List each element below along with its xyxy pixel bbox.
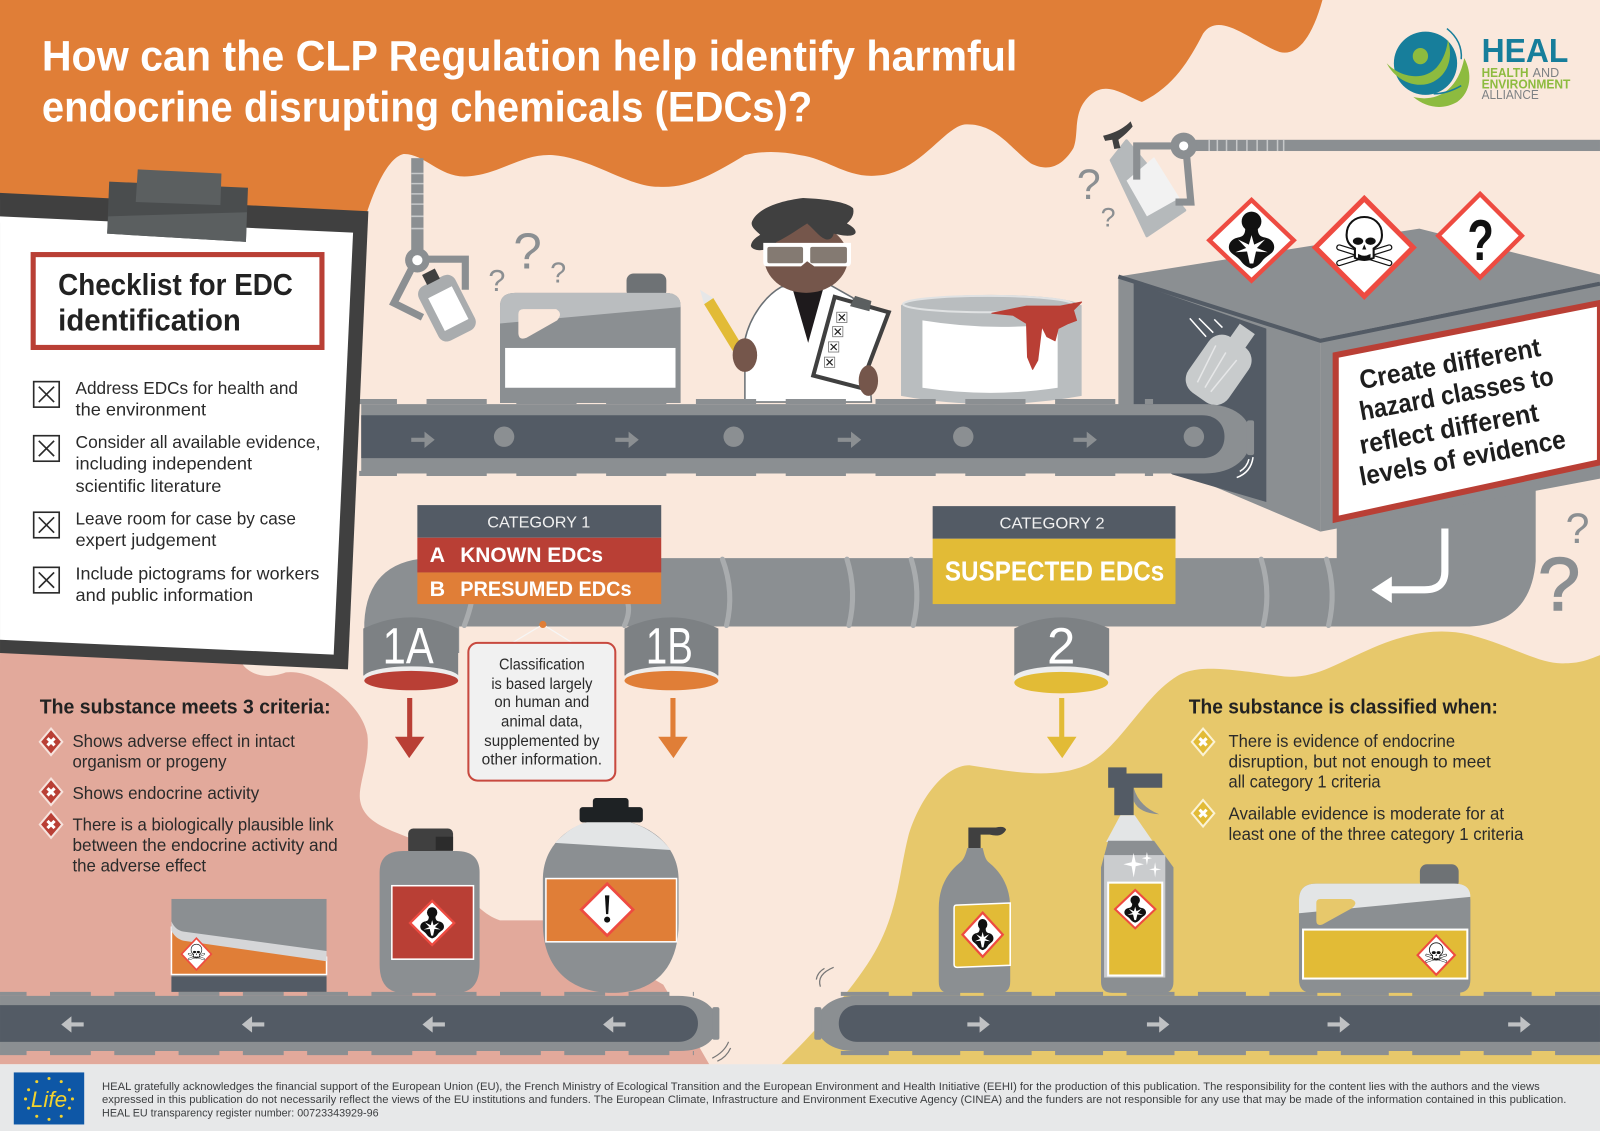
callout: supplemented by xyxy=(484,733,600,750)
red bottle xyxy=(380,829,480,993)
bucket xyxy=(901,295,1082,404)
nozzle 1A: 1A xyxy=(383,617,434,674)
checklist item 2: scientific literature xyxy=(76,476,221,496)
nozzle 1B xyxy=(624,617,718,690)
category 1 criteria: between the endocrine activity and xyxy=(72,835,338,855)
acknowledgement text: HEAL EU transparency register number: 00723343929-96 xyxy=(102,1107,379,1119)
checklist item 4: Include pictograms for workers xyxy=(76,564,320,584)
label: hazard classes: reflect different xyxy=(1357,397,1541,460)
checklist clipboard xyxy=(813,296,889,388)
category 2 criteria: least one of the three category 1 criteria xyxy=(1229,824,1524,844)
orange bottle xyxy=(543,798,679,993)
checklist heading: identification xyxy=(58,304,241,338)
question marks: ? xyxy=(1538,542,1580,626)
category 1 criteria: The substance meets 3 criteria: xyxy=(40,696,331,718)
question marks: ? xyxy=(513,222,542,279)
category 2 header: CATEGORY 2 xyxy=(999,516,1105,533)
shirt xyxy=(793,288,823,343)
yellow jug xyxy=(1299,864,1470,993)
pipe joints xyxy=(464,559,1332,625)
hazard pictograms on roof: ? xyxy=(1467,209,1494,273)
title xyxy=(42,32,1017,131)
checklist item 1: Address EDCs for health and xyxy=(76,378,298,398)
nozzle 2 xyxy=(1013,617,1109,693)
pump bottle xyxy=(939,827,1010,993)
question marks: ? xyxy=(550,258,566,290)
callout: on human and xyxy=(494,694,589,711)
checklist item 2: including independent xyxy=(76,453,252,473)
category 1 criteria: Shows endocrine activity xyxy=(72,783,260,803)
category 1 header: A xyxy=(430,543,445,567)
bottom right conveyor xyxy=(814,967,1600,1053)
coat xyxy=(745,285,871,402)
question marks: ? xyxy=(1101,203,1116,233)
category 1 header xyxy=(417,505,661,604)
head xyxy=(764,223,848,293)
jug on top conveyor xyxy=(500,273,681,403)
spray bottle xyxy=(1101,767,1173,993)
EU Life logo: Life xyxy=(31,1087,67,1112)
category 2 criteria: all category 1 criteria xyxy=(1229,772,1381,792)
category 2 criteria xyxy=(1189,696,1524,844)
callout: Classification xyxy=(499,656,585,673)
category 1 criteria: organism or progeny xyxy=(72,751,227,771)
category 2 header: SUSPECTED EDCs xyxy=(945,556,1164,587)
hair xyxy=(751,198,856,250)
question marks: ? xyxy=(488,264,505,298)
arrow down orange xyxy=(658,698,688,758)
category 2 header xyxy=(933,506,1176,604)
flat orange box xyxy=(171,899,327,992)
hand right xyxy=(859,365,878,396)
arrow down yellow xyxy=(1047,698,1077,758)
machine box xyxy=(1118,229,1600,532)
category 1 criteria xyxy=(40,696,338,875)
return arrow xyxy=(1371,529,1445,603)
category 1 header: CATEGORY 1 xyxy=(487,515,591,532)
orange header shape xyxy=(0,0,1322,214)
checklist heading: Checklist for EDC xyxy=(58,268,293,302)
category 2 criteria: disruption, but not enough to meet xyxy=(1229,751,1491,771)
label: hazard classes: levels of evidence xyxy=(1357,424,1568,492)
footer xyxy=(0,1064,1600,1131)
question marks: ? xyxy=(1566,505,1589,553)
checklist item 2 xyxy=(34,432,320,496)
pink background shape xyxy=(0,643,709,1064)
hazard pictograms on roof xyxy=(1209,194,1522,296)
checklist item 2: Consider all available evidence, xyxy=(76,432,320,452)
callout: animal data, xyxy=(501,714,583,731)
top conveyor xyxy=(359,402,1254,478)
HEAL logo xyxy=(1387,29,1571,107)
falling bottle xyxy=(1179,315,1267,411)
callout: other information. xyxy=(482,751,602,768)
checklist heading xyxy=(33,255,322,347)
category 1 criteria: Shows adverse effect in intact xyxy=(72,731,295,751)
HEAL logo: ENVIRONMENT xyxy=(1482,76,1571,91)
yellow background shape xyxy=(782,632,1600,1064)
category 1 header: B xyxy=(430,577,445,601)
callout xyxy=(468,621,615,781)
acknowledgement text: expressed in this publication do not necessarily reflect the views of the EU institutions and funders. The European Climate, Infrastructure and Environment Executive Agency (CINEA) and the funders are not responsible for any use that may be made of the information contained in this publication. xyxy=(102,1094,1566,1106)
checklist item 3 xyxy=(34,508,296,550)
motion lines xyxy=(1190,318,1222,337)
belt arrows xyxy=(411,432,1097,448)
acknowledgement text xyxy=(102,1081,1566,1119)
category 2 criteria: There is evidence of endocrine xyxy=(1229,731,1455,751)
acknowledgement text: HEAL gratefully acknowledges the financial support of the European Union (EU), the French Ministry of Ecological Transition and the European Environment and Health Initiative (EEHI) for the production of this publication. The responsibility for the content lies with the authors and the views xyxy=(102,1081,1540,1093)
HEAL logo: HEALTH xyxy=(1482,65,1529,80)
HEAL logo: HEAL xyxy=(1482,33,1568,70)
question marks: ? xyxy=(1077,161,1101,209)
arrow down red xyxy=(395,698,424,758)
red drip xyxy=(992,302,1082,369)
clip xyxy=(107,169,248,242)
label: hazard classes xyxy=(1336,303,1600,519)
category 2 criteria: The substance is classified when: xyxy=(1189,696,1498,718)
right crane and spray bottle xyxy=(1103,121,1600,236)
category 1 header: KNOWN EDCs xyxy=(460,543,603,567)
label: hazard classes: hazard classes to xyxy=(1357,361,1556,426)
checklist item 3: expert judgement xyxy=(76,530,217,550)
left crane and bottle xyxy=(394,158,479,345)
hand left xyxy=(733,338,757,372)
label: hazard classes: Create different xyxy=(1357,332,1543,395)
checklist item 4: and public information xyxy=(76,585,253,605)
nozzle 2: 2 xyxy=(1047,617,1075,674)
category 1 criteria: There is a biologically plausible link xyxy=(72,815,334,835)
HEAL logo: ALLIANCE xyxy=(1482,87,1539,102)
question marks xyxy=(488,161,1589,626)
pipe xyxy=(364,480,1536,653)
pencil xyxy=(704,298,760,381)
sparkles xyxy=(1123,852,1161,878)
callout: is based largely xyxy=(491,676,593,693)
checklist item 1 xyxy=(34,378,298,419)
bottom left conveyor xyxy=(0,994,731,1061)
checklist item 1: the environment xyxy=(76,399,206,419)
EU Life logo xyxy=(14,1072,84,1124)
clipboard panel xyxy=(0,169,368,669)
category 2 criteria: Available evidence is moderate for at xyxy=(1229,803,1504,823)
checklist item 4 xyxy=(34,564,320,605)
title: endocrine disrupting chemicals (EDCs)? xyxy=(42,83,812,131)
nozzle 1B: 1B xyxy=(646,617,693,674)
nozzle 1A xyxy=(363,617,459,690)
category 1 header: PRESUMED EDCs xyxy=(460,577,632,601)
goggles xyxy=(763,243,851,266)
category 1 criteria: the adverse effect xyxy=(72,855,206,875)
title: How can the CLP Regulation help identify harmful xyxy=(42,32,1017,80)
scientist xyxy=(700,198,889,402)
checklist item 3: Leave room for case by case xyxy=(76,508,296,528)
HEAL logo: AND xyxy=(1533,65,1559,80)
